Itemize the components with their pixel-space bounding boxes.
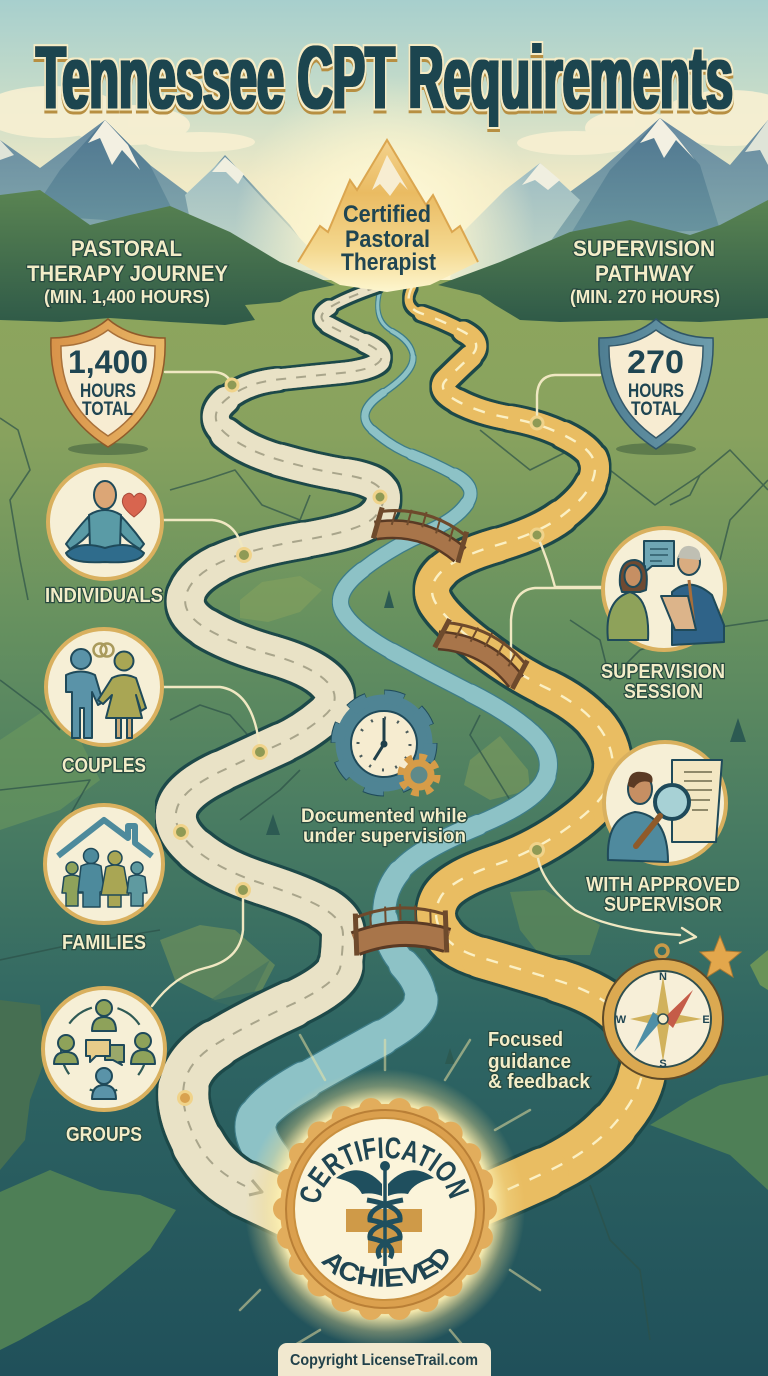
hills	[0, 190, 768, 325]
cross	[346, 1209, 422, 1253]
summit label	[341, 201, 436, 276]
callout: documented while under supervision: Documented while	[301, 806, 467, 827]
footer: copyright: Copyright LicenseTrail.com	[290, 1352, 478, 1369]
heading: supervision pathway: SUPERVISION	[573, 236, 715, 261]
label: supervision session: SUPERVISION	[601, 661, 725, 683]
label: groups: GROUPS	[66, 1124, 142, 1146]
label: individuals: INDIVIDUALS	[45, 585, 163, 607]
sun glow	[235, 75, 535, 375]
clouds	[0, 86, 768, 155]
heading: pastoral therapy journey: PASTORAL	[71, 236, 182, 261]
icon: groups	[43, 988, 165, 1110]
icon: compass: W	[616, 1014, 627, 1026]
callout: documented while under supervision: under supervision	[303, 826, 466, 847]
footer: copyright	[278, 1343, 491, 1376]
callout: focused guidance & feedback: & feedback	[488, 1071, 591, 1093]
river	[255, 290, 548, 1159]
bridge 3	[354, 902, 448, 956]
heading: pastoral therapy journey	[27, 236, 228, 307]
icon: couples	[46, 629, 162, 745]
bridge 2	[435, 612, 531, 689]
heading: pastoral therapy journey: THERAPY JOURNEY	[27, 261, 228, 286]
shield: 1,400 hours: TOTAL	[82, 399, 133, 420]
callout: documented while under supervision	[301, 806, 467, 847]
callout: focused guidance & feedback: Focused	[488, 1029, 563, 1051]
icon: star	[700, 936, 741, 977]
icon: supervision session	[603, 528, 725, 650]
ground gradient	[0, 280, 768, 1376]
trees	[266, 590, 746, 1064]
heading: supervision pathway	[570, 236, 720, 307]
shield: 1,400 hours: 1,400	[68, 344, 148, 380]
shield: 270 hours: HOURS	[628, 381, 684, 402]
background: sky	[0, 0, 768, 300]
label: supervision session: SESSION	[624, 681, 703, 703]
seal: certification achieved: ACHIEVED	[321, 1249, 448, 1287]
caduceus	[336, 1161, 434, 1266]
callout: focused guidance & feedback	[488, 1029, 591, 1093]
map cracks	[0, 418, 768, 1340]
shield: 1,400 hours: HOURS	[80, 381, 136, 402]
road: supervision pathway (gold)	[409, 287, 643, 1205]
icon: compass: N	[659, 971, 667, 983]
summit label: Pastoral	[345, 226, 430, 253]
callout: focused guidance & feedback: guidance	[488, 1051, 571, 1073]
icon: compass: E	[702, 1014, 710, 1026]
label: with approved supervisor	[586, 874, 740, 916]
icon: gear clock	[338, 697, 436, 792]
shield: 270 hours	[599, 319, 713, 455]
land patches	[0, 576, 768, 1350]
icon: families	[45, 805, 163, 923]
label: supervision session	[601, 661, 725, 703]
icon: compass: S	[659, 1058, 667, 1070]
icon: individuals	[48, 465, 162, 579]
summit label: Certified	[343, 201, 431, 228]
shield: 1,400 hours	[51, 319, 165, 455]
far mountains	[0, 118, 768, 300]
seal: certification achieved	[238, 1034, 542, 1343]
heading: supervision pathway: (MIN. 270 HOURS)	[570, 287, 720, 307]
route nodes	[174, 379, 544, 1104]
seal text	[320, 1158, 450, 1205]
icon: compass	[603, 945, 723, 1079]
shield: 270 hours: TOTAL	[631, 399, 682, 420]
heading: pastoral therapy journey: (MIN. 1,400 HOURS)	[44, 287, 210, 307]
connectors	[152, 372, 696, 1006]
summit label: Therapist	[341, 249, 436, 276]
label: couples: COUPLES	[62, 755, 146, 777]
summit: certified pastoral therapist	[298, 140, 478, 292]
label: with approved supervisor: SUPERVISOR	[604, 894, 723, 916]
label: families: FAMILIES	[62, 932, 146, 954]
label: with approved supervisor: WITH APPROVED	[586, 874, 740, 896]
seal: certification achieved: CERTIFICATION	[300, 1137, 470, 1202]
bridge 1	[373, 500, 469, 563]
heading: supervision pathway: PATHWAY	[595, 261, 694, 286]
road: pastoral therapy journey (cream)	[176, 287, 383, 1220]
shield: 270 hours: 270	[627, 344, 684, 380]
icon: approved supervisor	[604, 742, 726, 864]
